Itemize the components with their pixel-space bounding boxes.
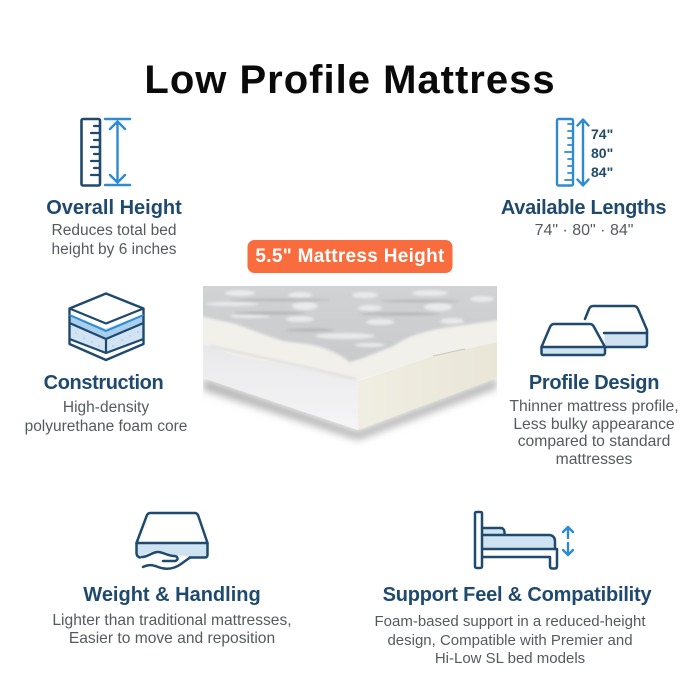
heading: available lengths: Available Lengths bbox=[501, 197, 666, 219]
heading: construction: Construction bbox=[44, 372, 163, 394]
title: Low Profile Mattress bbox=[144, 58, 556, 102]
badge: mattress height: 5.5" Mattress Height bbox=[255, 246, 445, 267]
heading: overall height: Overall Height bbox=[46, 197, 182, 219]
text: construction: High-density bbox=[63, 399, 149, 416]
text: profile design: compared to standard bbox=[518, 433, 670, 450]
heading: support feel and compatibility: Support Feel & Compatibility bbox=[383, 584, 651, 606]
text: weight and handling: Easier to move and reposition bbox=[69, 630, 275, 647]
text: profile design: Less bulky appearance bbox=[513, 416, 675, 432]
heading: weight and handling: Weight & Handling bbox=[83, 584, 261, 606]
icon: ruler with lengths: 80" bbox=[591, 145, 613, 161]
badge: mattress height bbox=[248, 240, 452, 273]
right foam face bbox=[358, 342, 497, 430]
text: support feel and compatibility: Foam-based support in a reduced-height bbox=[374, 613, 646, 630]
text: weight and handling: Lighter than traditional mattresses, bbox=[52, 612, 292, 629]
text: support feel and compatibility bbox=[374, 613, 646, 667]
quilted top bbox=[203, 286, 497, 362]
text: construction bbox=[25, 399, 187, 435]
text: support feel and compatibility: design, Compatible with Premier and bbox=[387, 632, 633, 648]
left foam face bbox=[203, 340, 358, 430]
icon: ruler with lengths: 84" bbox=[591, 164, 613, 180]
text: overall height: Reduces total bed bbox=[52, 222, 176, 239]
text: construction: polyurethane foam core bbox=[25, 418, 187, 435]
mattress photo bbox=[203, 286, 497, 444]
shadow bbox=[203, 378, 497, 440]
text: support feel and compatibility: Hi-Low SL bed models bbox=[435, 650, 585, 667]
text: profile design: mattresses bbox=[556, 450, 632, 468]
icon: ruler with lengths: 74" bbox=[591, 126, 613, 142]
text: available lengths: 74" · 80" · 84" bbox=[535, 222, 633, 239]
heading: profile design: Profile Design bbox=[529, 372, 659, 394]
text: overall height bbox=[52, 222, 176, 258]
text: overall height: height by 6 inches bbox=[52, 241, 176, 258]
text: profile design bbox=[509, 398, 679, 468]
text: profile design: Thinner mattress profile, bbox=[509, 398, 679, 415]
white comfort layer bbox=[203, 310, 497, 381]
text: weight and handling bbox=[52, 612, 292, 647]
